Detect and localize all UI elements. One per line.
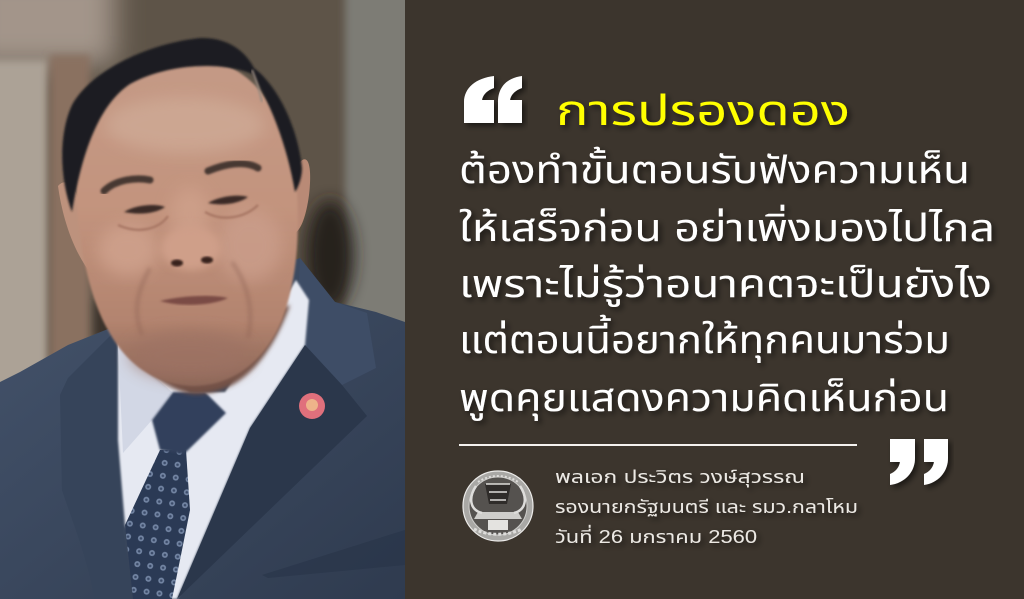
divider line	[459, 444, 857, 446]
speaker title: รองนายกรัฐมนตรี และ รมว.กลาโหม	[555, 497, 858, 517]
lapel pin	[299, 393, 325, 419]
mouth	[160, 296, 228, 305]
face	[76, 58, 298, 386]
suit jacket	[0, 258, 405, 599]
icon: government seal	[463, 471, 533, 541]
eyes	[118, 196, 258, 230]
speaker name: พลเอก ประวิตร วงษ์สุวรรณ	[555, 467, 805, 488]
photo: portrait of the speaker	[0, 0, 420, 599]
cheek tones	[98, 187, 282, 379]
photo background	[0, 0, 405, 382]
facial folds	[137, 262, 250, 338]
neck shadow	[125, 305, 290, 394]
quote text	[459, 146, 995, 421]
right lower lapel	[177, 345, 367, 599]
attribution text	[555, 467, 858, 547]
right upper collar	[298, 258, 376, 385]
hair	[62, 38, 302, 212]
necktie	[125, 392, 226, 599]
panel: quote background	[405, 0, 1024, 599]
shirt collar shade	[118, 345, 172, 453]
quote line 3: เพราะไม่รู้ว่าอนาคตจะเป็นยังไง	[459, 264, 992, 307]
eyebrows	[104, 164, 258, 191]
closing quotation mark	[890, 439, 948, 485]
quote line 2: ให้เสร็จก่อน อย่าเพิ่งมองไปไกล	[459, 204, 995, 250]
ears	[58, 159, 310, 275]
quote line 4: แต่ตอนนี้อยากให้ทุกคนมาร่วม	[459, 314, 950, 363]
hair parting	[252, 70, 262, 102]
forehead highlight	[105, 97, 265, 153]
pocket	[264, 566, 291, 575]
quote line 5: พูดคุยแสดงความคิดเห็นก่อน	[459, 378, 949, 421]
quote line 1: ต้องทำขั้นตอนรับฟังความเห็น	[459, 146, 970, 192]
heading: reconciliation: การปรองดอง	[556, 87, 850, 134]
nose	[162, 232, 219, 271]
shirt	[118, 280, 309, 599]
date: วันที่ 26 มกราคม 2560	[555, 524, 757, 547]
opening quotation mark	[464, 76, 522, 123]
left lapel	[60, 336, 117, 424]
